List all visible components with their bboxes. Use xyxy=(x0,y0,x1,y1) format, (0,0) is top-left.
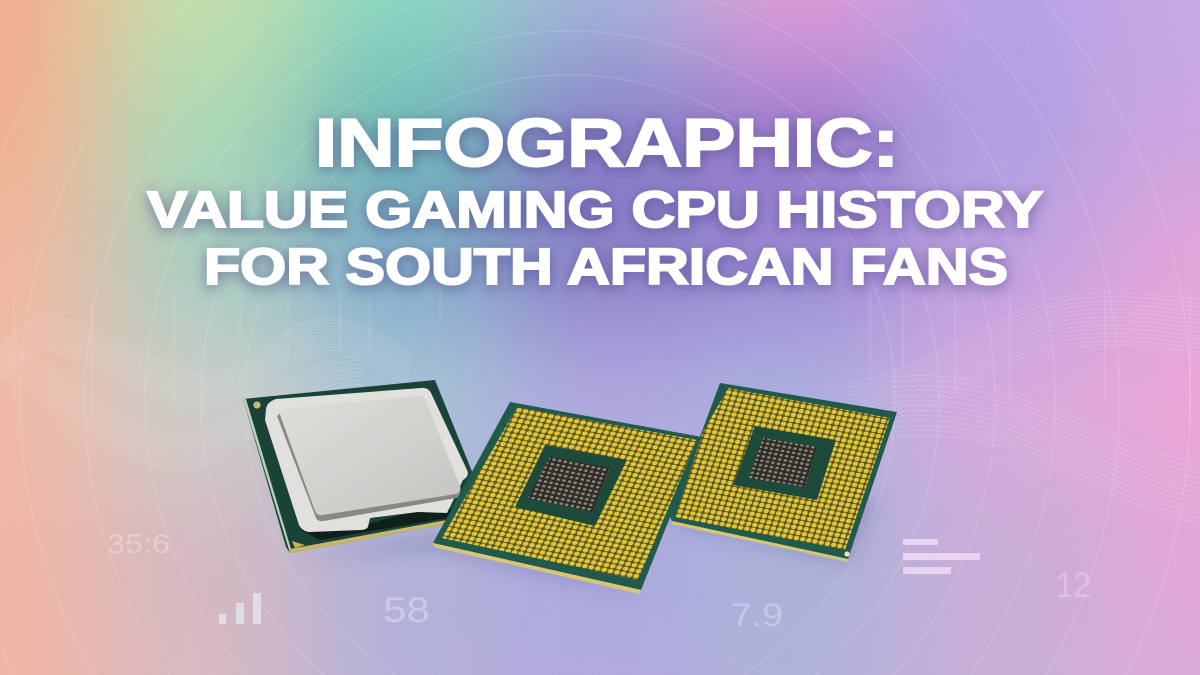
title: FOR SOUTH AFRICAN FANS xyxy=(204,241,1008,298)
icon: text lines xyxy=(903,539,980,574)
title: INFOGRAPHIC: xyxy=(315,108,899,184)
spreader base xyxy=(265,388,468,532)
title line 1: INFOGRAPHIC: xyxy=(315,105,899,181)
faint stat: 7.9: 7.9 xyxy=(731,597,783,633)
pins xyxy=(675,388,890,550)
title line 3: FOR SOUTH AFRICAN FANS xyxy=(204,238,1008,295)
title xyxy=(147,105,1043,298)
faint stat: 12: 12 xyxy=(1056,566,1091,605)
faint stat: 35:6: 35:6 xyxy=(107,529,170,559)
board xyxy=(243,380,490,553)
die contacts xyxy=(528,457,610,512)
corner triangle xyxy=(292,541,305,548)
die pad xyxy=(515,445,627,526)
processor: heat spreader CPU xyxy=(243,380,490,553)
mounting dot xyxy=(253,401,261,409)
pins xyxy=(442,407,697,580)
processor: rear pin-grid CPU xyxy=(670,383,897,562)
lower dark recess xyxy=(300,508,470,540)
title: VALUE GAMING CPU HISTORY xyxy=(147,184,1043,241)
board xyxy=(433,402,702,590)
board xyxy=(670,383,897,559)
icon: bar chart xyxy=(219,593,261,624)
title line 2: VALUE GAMING CPU HISTORY xyxy=(147,181,1043,238)
die pad xyxy=(733,426,836,500)
processor: front pin-grid CPU xyxy=(433,402,702,594)
spreader plateau xyxy=(280,396,460,515)
soft shadows under processors xyxy=(290,480,880,598)
spreader plateau shadow xyxy=(277,412,462,521)
faint stat: 58: 58 xyxy=(383,591,430,630)
corner marker xyxy=(844,551,850,557)
die contacts xyxy=(749,438,817,487)
